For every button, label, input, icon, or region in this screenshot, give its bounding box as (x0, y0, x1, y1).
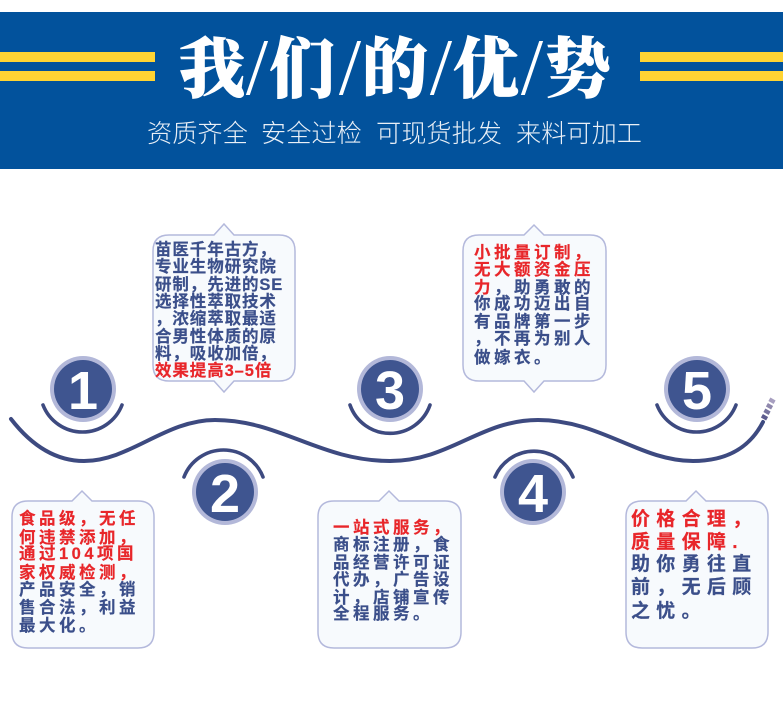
callout 2: research: ，浓缩萃取最适 (155, 308, 277, 328)
title: / (339, 24, 362, 112)
step 4 badge: 4 (518, 464, 548, 524)
callout 2: research: 研制，先进的SE (155, 275, 283, 294)
step 3 badge (350, 356, 430, 433)
subtitle: 资质齐全 (147, 120, 248, 148)
callout 3: one-stop service: 全程服务。 (333, 603, 433, 623)
subtitle: 可现货批发 (376, 120, 502, 148)
step 1 badge: 1 (68, 361, 98, 421)
callout 2: research: 苗医千年古方， (155, 239, 277, 259)
callout 5: price and quality: 之忧。 (631, 599, 707, 622)
callout 5: price and quality: 质量保障. (631, 530, 744, 553)
callout 2: research: 效果提高3–5倍 (155, 360, 272, 380)
callout 1: food grade (12, 491, 154, 648)
step 2 badge (184, 450, 263, 525)
callout 3: one-stop service: 计，店铺宣传 (333, 587, 453, 607)
callout 1: food grade: 何违禁添加， (19, 528, 139, 547)
header banner (0, 12, 783, 169)
title (179, 24, 611, 112)
title: 们 (269, 34, 335, 107)
callout 4: small batch: 有品牌第一步 (474, 311, 594, 331)
step 4 badge (495, 451, 573, 525)
title: / (246, 24, 269, 112)
title: 的 (362, 34, 428, 107)
callout 5: price and quality: 前，无后顾 (631, 576, 758, 598)
callout 4: small batch: 你成功迈出自 (474, 293, 594, 313)
callout 1: food grade: 家权威检测， (19, 562, 139, 582)
callout 2: research: 专业生物研究院 (155, 256, 277, 276)
callout 2: research (153, 224, 295, 392)
callout 1: food grade: 最大化。 (19, 615, 99, 635)
step 5 badge (657, 356, 736, 432)
callout 1: food grade: 售合法，利益 (19, 597, 139, 617)
callout 4: small batch: 力，助勇敢的 (474, 278, 594, 297)
callout 3: one-stop service: 品经营许可证 (333, 553, 453, 572)
title: 优 (453, 34, 519, 107)
step 2 badge: 2 (210, 464, 240, 524)
wave line with arrow (11, 399, 773, 461)
subtitle (147, 120, 642, 148)
callout 4: small batch (463, 225, 606, 392)
title: 我 (179, 34, 245, 107)
title: / (430, 24, 453, 112)
title: 势 (545, 34, 611, 107)
subtitle: 来料可加工 (516, 120, 642, 148)
callout 3: one-stop service: 代办，广告设 (333, 570, 453, 589)
title: / (521, 24, 544, 112)
callout 2: research: 选择性萃取技术 (155, 291, 277, 311)
callout 5: price and quality: 价格合理， (631, 508, 758, 530)
left yellow stripes (0, 52, 155, 81)
callout 2: research: 合男性体质的原 (155, 326, 277, 346)
callout 5: price and quality: 助你勇往直 (631, 553, 758, 575)
callout 4: small batch: ，不再为别人 (474, 329, 594, 348)
step 5 badge: 5 (682, 361, 712, 421)
callout 3: one-stop service: 商标注册，食 (333, 534, 453, 554)
callout 4: small batch: 无大额资金压 (474, 259, 594, 279)
callout 4: small batch: 小批量订制， (474, 243, 594, 262)
step 1 badge (43, 356, 122, 432)
step 3 badge: 3 (375, 361, 405, 421)
callout 4: small batch: 做嫁衣。 (474, 347, 554, 367)
callout 5: price and quality (626, 491, 768, 648)
callout 2: research: 料，吸收加倍， (155, 343, 277, 363)
callout 1: food grade: 食品级，无任 (19, 508, 139, 528)
callout 1: food grade: 产品安全，销 (19, 579, 139, 599)
subtitle: 安全过检 (261, 120, 362, 148)
right yellow stripes (640, 52, 783, 81)
callout 3: one-stop service (318, 491, 461, 648)
callout 1: food grade: 通过104项国 (19, 544, 137, 563)
arrow tip chevrons (764, 399, 773, 419)
callout 3: one-stop service: 一站式服务， (333, 518, 453, 537)
